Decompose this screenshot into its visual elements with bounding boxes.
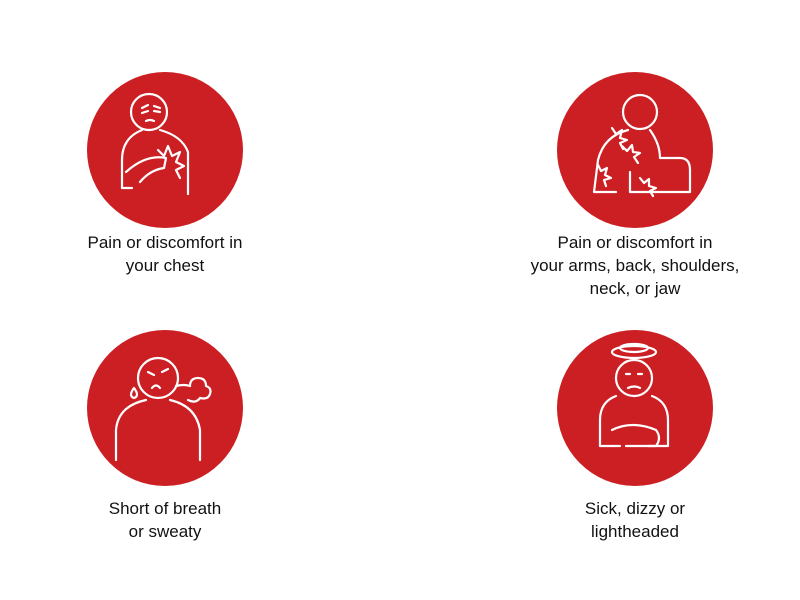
- panel: short of breath icon: [87, 330, 243, 486]
- text: breath caption: or sweaty: [129, 522, 201, 541]
- text: chest caption: Pain or discomfort in: [88, 233, 242, 252]
- text: arms caption: neck, or jaw: [590, 279, 680, 298]
- text: arms caption: [530, 233, 739, 298]
- text: dizzy caption: [585, 499, 685, 541]
- panel: chest pain icon: [87, 72, 243, 228]
- text: chest caption: your chest: [126, 256, 204, 275]
- text: breath caption: [109, 499, 221, 541]
- text: breath caption: Short of breath: [109, 499, 221, 518]
- text: arms caption: Pain or discomfort in: [558, 233, 712, 252]
- text: chest caption: [88, 233, 242, 275]
- text: arms caption: your arms, back, shoulders,: [531, 256, 739, 275]
- panel: arms back shoulders icon: [557, 72, 713, 228]
- panel: dizzy icon: [557, 330, 713, 486]
- text: dizzy caption: lightheaded: [591, 522, 679, 541]
- text: dizzy caption: Sick, dizzy or: [585, 499, 685, 518]
